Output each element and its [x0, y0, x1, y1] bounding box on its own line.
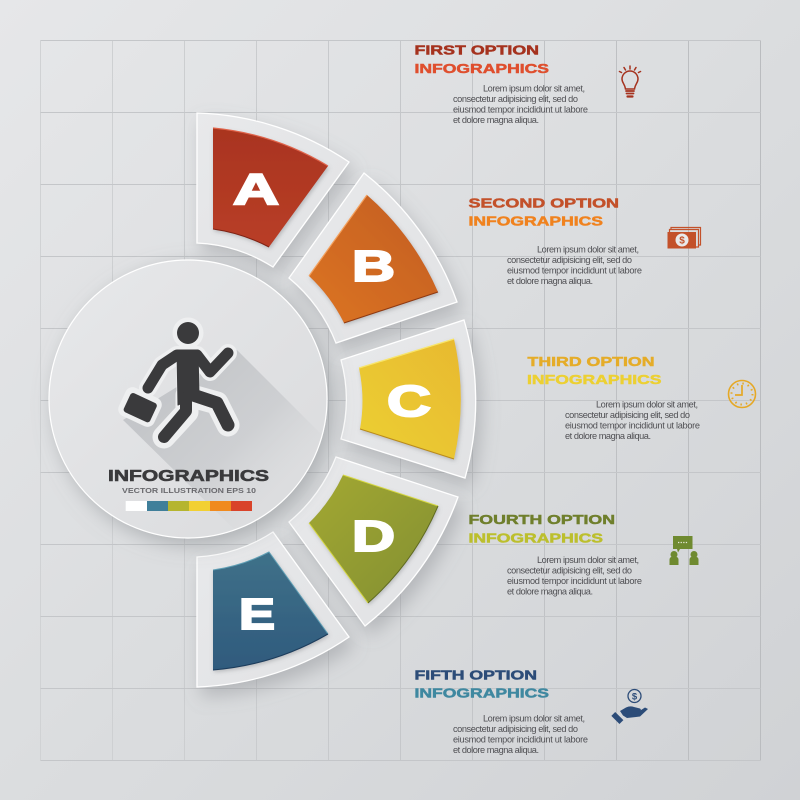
option 2 text: eiusmod tempor incididunt ut labore — [507, 266, 642, 276]
option 1 text: consectetur adipisicing elit, sed do — [453, 94, 578, 104]
segment B — [289, 173, 457, 343]
segment C: C — [387, 377, 431, 426]
segment D — [289, 457, 458, 626]
option 5 text: Lorem ipsum dolor sit amet, — [483, 714, 585, 724]
option 3 text: consectetur adipisicing elit, sed do — [565, 410, 690, 420]
option 1 text: FIRST OPTION — [414, 42, 539, 58]
icon: money: $ — [679, 236, 685, 246]
icon: light bulb — [620, 66, 640, 96]
option 2 text: et dolore magna aliqua. — [507, 276, 593, 286]
heading: infographics: INFOGRAPHICS — [108, 468, 269, 485]
segment A — [197, 113, 349, 267]
option 4 text: et dolore magna aliqua. — [507, 586, 593, 596]
option 2 text: INFOGRAPHICS — [468, 214, 603, 228]
option 3 text: eiusmod tempor incididunt ut labore — [565, 420, 700, 430]
option 1 text — [414, 42, 588, 125]
segment C — [341, 320, 476, 478]
option 5 text: FIFTH OPTION — [414, 668, 537, 682]
option 3 text — [527, 354, 700, 441]
option 5 text: eiusmod tempor incididunt ut labore — [453, 734, 588, 744]
segment B: B — [352, 242, 395, 291]
icon: two people talking — [670, 536, 698, 565]
icon: clock — [728, 380, 756, 408]
option 3 text: et dolore magna aliqua. — [565, 431, 651, 441]
option 4 text: consectetur adipisicing elit, sed do — [507, 566, 632, 576]
option 2 text: SECOND OPTION — [468, 196, 619, 210]
option 2 text: consectetur adipisicing elit, sed do — [507, 255, 632, 265]
option 1 text: Lorem ipsum dolor sit amet, — [483, 84, 585, 94]
option 4 text: INFOGRAPHICS — [468, 530, 603, 546]
option 5 text — [414, 668, 588, 755]
icon: running businessman — [123, 318, 228, 437]
option 5 text: INFOGRAPHICS — [414, 686, 549, 700]
subheading: VECTOR ILLUSTRATION EPS 10 — [122, 488, 256, 495]
option 4 text: eiusmod tempor incididunt ut labore — [507, 576, 642, 586]
option 3 text: INFOGRAPHICS — [527, 372, 662, 387]
option 4 text — [468, 512, 642, 596]
option 3 text: THIRD OPTION — [528, 354, 654, 369]
color bar — [126, 501, 252, 511]
option 1 text: et dolore magna aliqua. — [453, 115, 539, 125]
option 2 text — [468, 196, 642, 286]
option 3 text: Lorem ipsum dolor sit amet, — [596, 400, 698, 410]
segment A: A — [233, 165, 279, 214]
option 4 text: Lorem ipsum dolor sit amet, — [537, 555, 639, 565]
option 2 text: Lorem ipsum dolor sit amet, — [537, 244, 639, 254]
segment E: E — [239, 590, 275, 639]
segment E — [197, 532, 349, 687]
option 4 text: FOURTH OPTION — [468, 512, 615, 527]
icon: money — [668, 228, 700, 248]
option 1 text: INFOGRAPHICS — [414, 61, 549, 76]
long shadow of figure — [123, 350, 302, 501]
icon: hand with coin: $ — [632, 692, 638, 702]
option 5 text: et dolore magna aliqua. — [453, 745, 539, 755]
icon: hand with coin — [611, 690, 648, 724]
option 1 text: eiusmod tempor incididunt ut labore — [453, 104, 588, 114]
center disc — [49, 260, 327, 538]
segment D: D — [352, 512, 395, 561]
option 5 text: consectetur adipisicing elit, sed do — [453, 724, 578, 734]
